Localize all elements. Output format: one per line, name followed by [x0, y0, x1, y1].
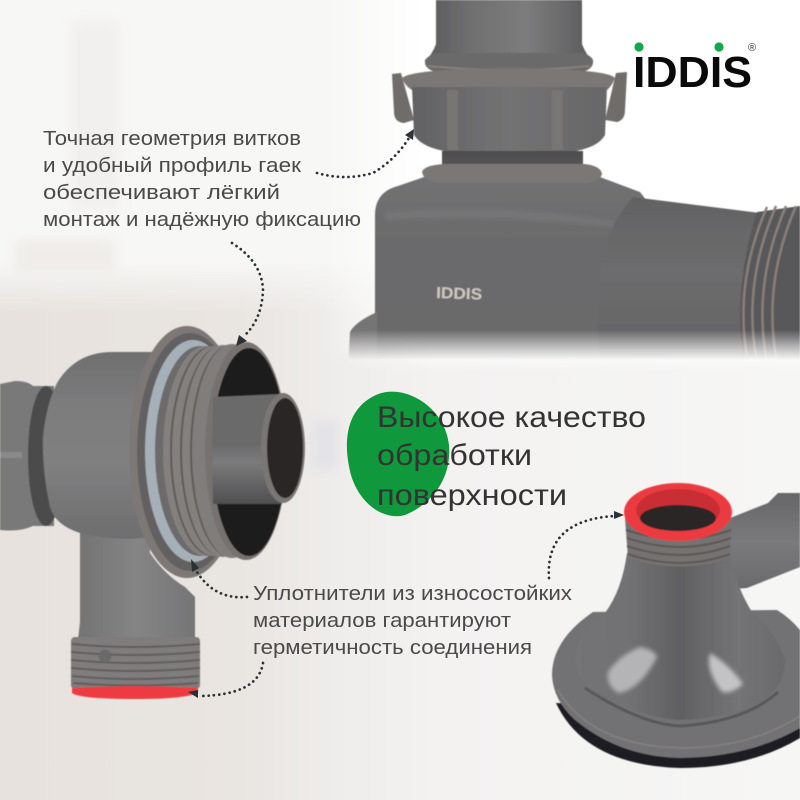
neck thread: [625, 518, 732, 566]
thread rings: [163, 346, 249, 556]
nut ears: [392, 73, 414, 123]
sealing ring: [145, 340, 241, 562]
green blob: [347, 392, 449, 516]
product: siphon bottom view: [552, 483, 800, 768]
collar: [425, 53, 593, 71]
text block: seals: Уплотнители из износостойких: [253, 582, 573, 605]
text block: seals: герметичность соединения: [253, 636, 532, 659]
gasket opening: [640, 505, 716, 531]
inner tube opening: [267, 398, 303, 498]
side pipe: [720, 493, 800, 590]
horizontal outlet pipe: [614, 198, 758, 358]
text block: seals: [253, 582, 573, 659]
body: [375, 177, 650, 360]
red gasket: [624, 483, 732, 541]
spout thread: [71, 637, 200, 689]
flange: [422, 164, 602, 183]
red gasket: [72, 686, 198, 699]
text block: thread and nut: и удобный профиль гаек: [43, 154, 302, 177]
text block: thread and nut: обеспечивают лёгкий: [43, 181, 280, 204]
arrow: to thread: [232, 243, 263, 346]
small logo on body: IDDIS: [436, 285, 483, 304]
dark neck: [28, 386, 64, 526]
arrow: to red gasket left: [188, 663, 263, 698]
outlet thread: [740, 206, 800, 362]
text block: thread and nut: [43, 127, 361, 231]
heading: surface quality: поверхности: [377, 479, 567, 512]
logo: IDDIS: ®: [748, 42, 756, 54]
nut flange: [402, 68, 615, 90]
arrow: to nut: [317, 129, 414, 177]
nut body: [412, 87, 607, 152]
logo: IDDIS: IDDIS: [633, 48, 752, 97]
cone highlights: [608, 647, 657, 693]
cone and dome: [575, 553, 785, 720]
rubber seal: [556, 703, 800, 768]
flange: [129, 326, 245, 578]
drop spout: [78, 530, 195, 640]
text block: thread and nut: монтаж и надёжную фиксацию: [43, 208, 361, 231]
opening rim: [205, 342, 287, 560]
heading: surface quality: [377, 401, 646, 512]
text block: seals: материалов гарантируют: [253, 609, 512, 632]
base plate: [552, 610, 800, 758]
product: top siphon view: [349, 0, 800, 362]
arrow: to red gasket right: [549, 511, 624, 578]
main cylinder: [43, 352, 170, 539]
opening interior: [212, 348, 286, 556]
upper pipe: [430, 0, 588, 56]
neck: [441, 150, 584, 165]
arrow: to sealing ring: [191, 559, 247, 597]
inner tube: [212, 394, 282, 504]
base disk: [349, 312, 377, 362]
side nut: [0, 381, 54, 530]
product: siphon open end view: [0, 326, 305, 699]
text block: thread and nut: Точная геометрия витков: [43, 127, 301, 150]
heading: surface quality: обработки: [377, 439, 532, 472]
heading: surface quality: Высокое качество: [377, 401, 646, 434]
